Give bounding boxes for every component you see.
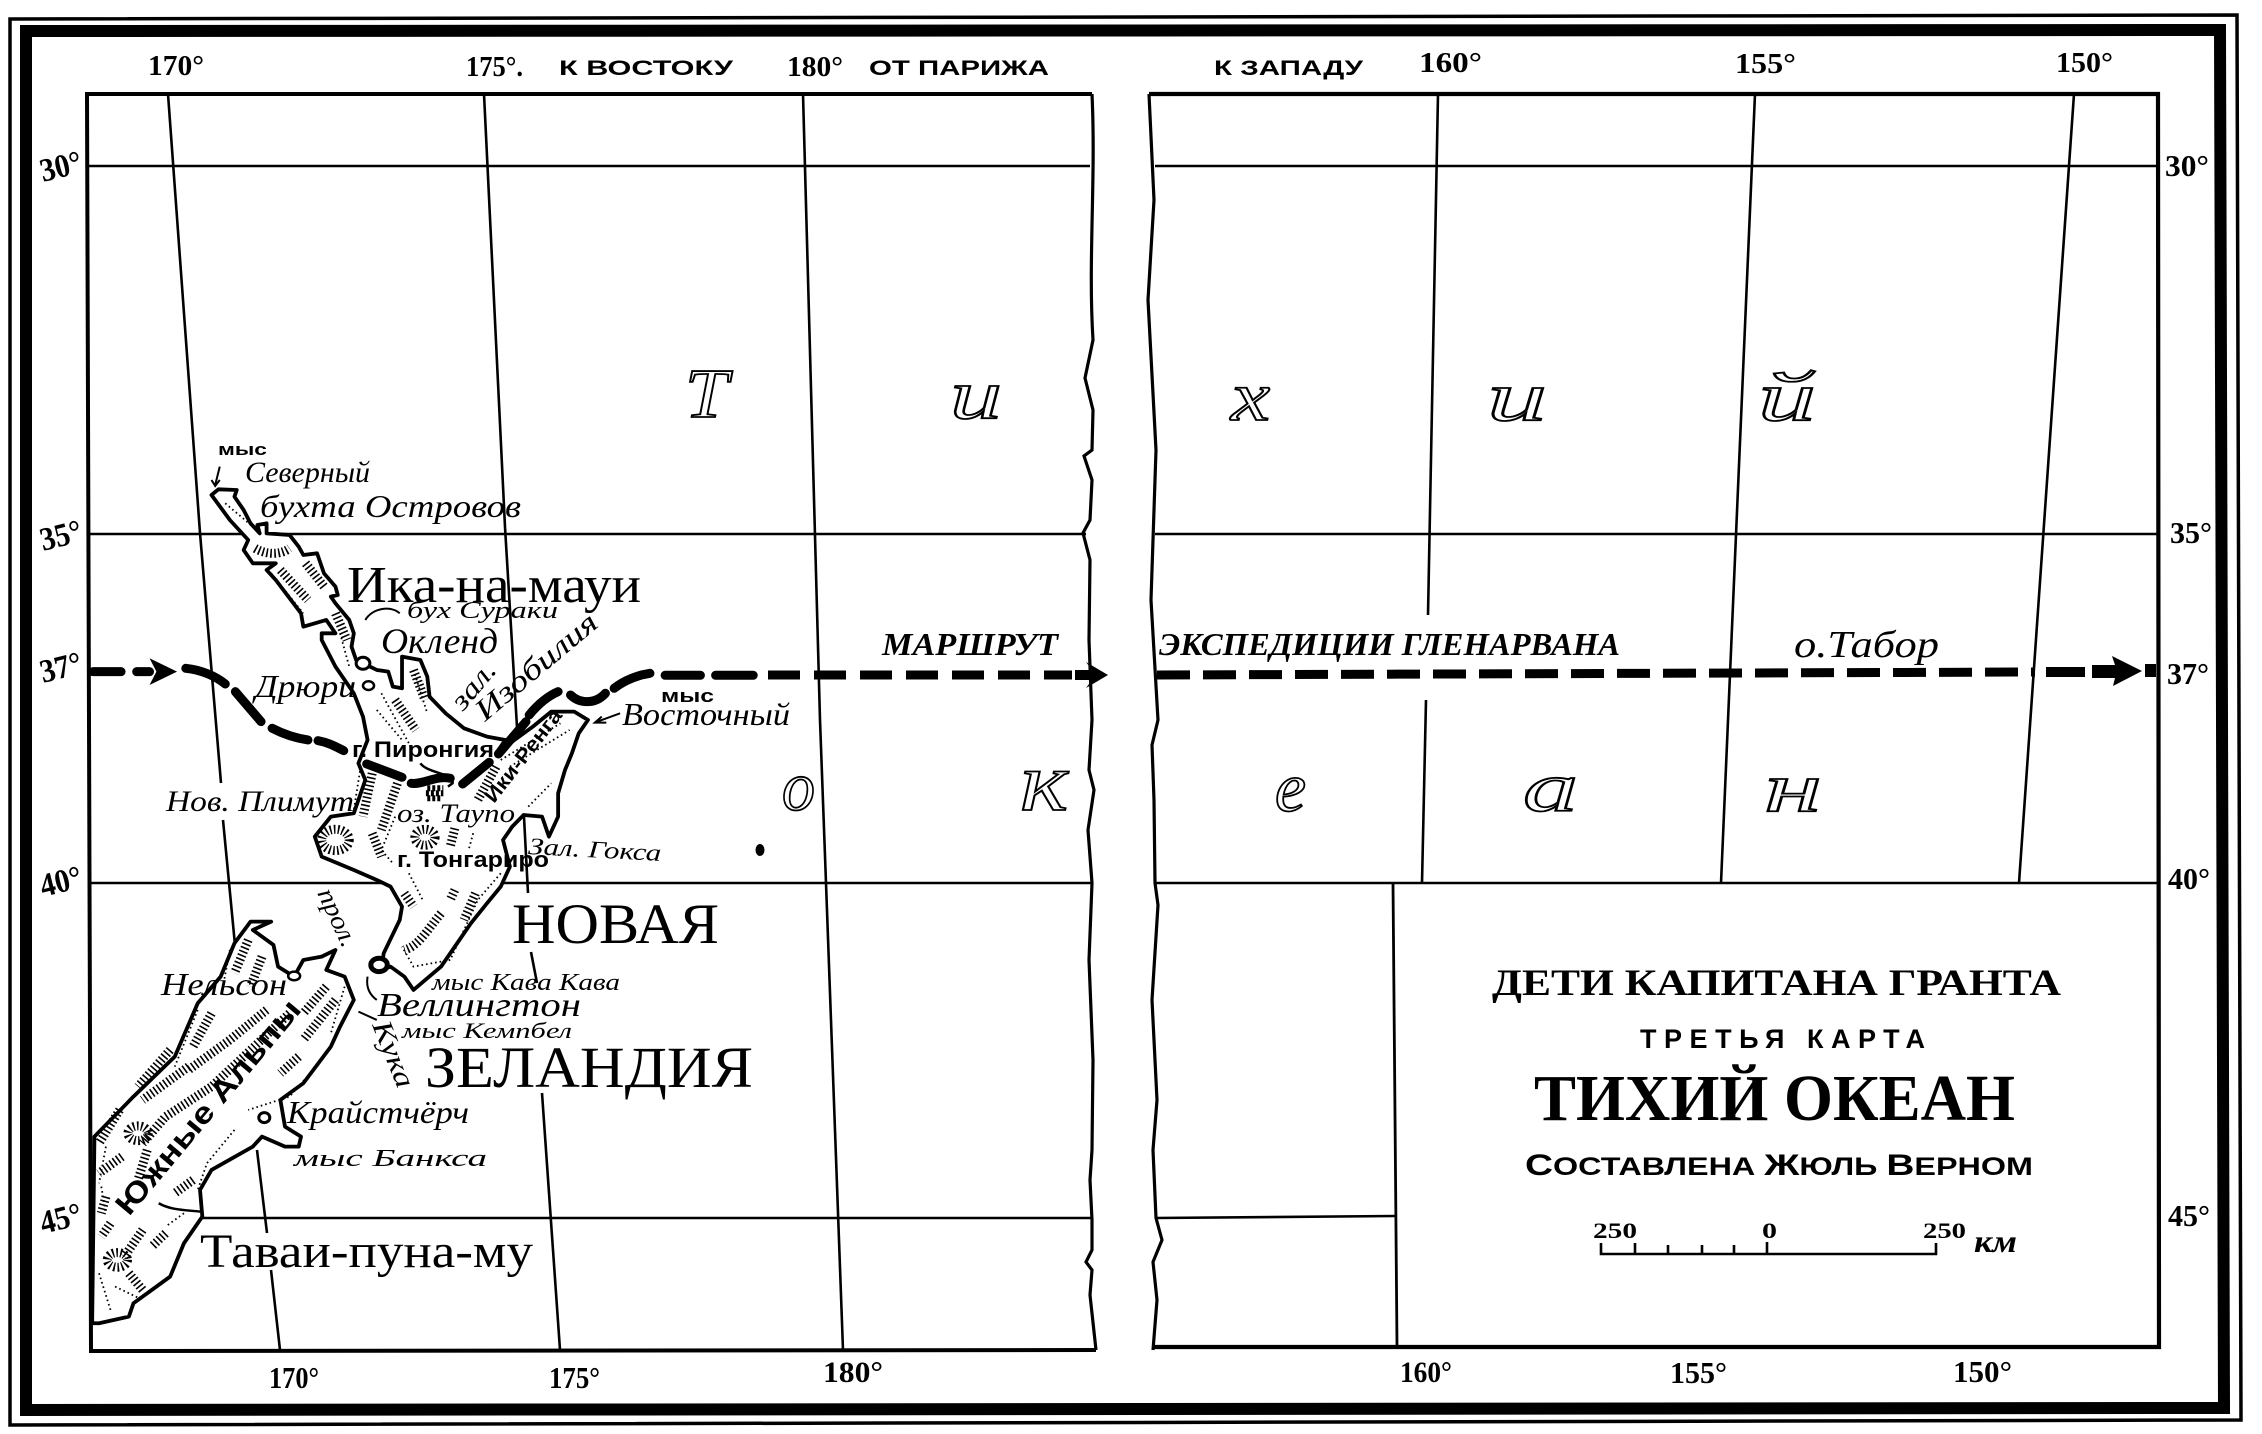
Веллингтон: Веллингтон [377,987,581,1024]
route arrow right panel [2092,656,2156,686]
letter х: х [1230,359,1270,436]
г. Тонгариро: г. Тонгариро [397,847,549,872]
title block [1492,963,2061,1182]
мыс north: мыс [218,440,267,459]
map number: ТРЕТЬЯ КАРТА [1640,1024,1925,1054]
small leader arrows [212,467,620,1020]
label 180: 180° [787,52,843,83]
lat 30: 30° [36,145,86,190]
Зал. Гокса: Зал. Гокса [528,834,662,867]
letter н: н [1764,750,1822,827]
label 150: 150° [2056,48,2113,79]
ЗЕЛАНДИЯ: ЗЕЛАНДИЯ [425,1035,753,1100]
bottom 170: 170° [269,1360,319,1395]
panel: left map grid [87,94,1096,1351]
label east: К ВОСТОКУ [559,57,734,80]
Крайстчёрч: Крайстчёрч [286,1094,469,1130]
label west: К ЗАПАДУ [1214,57,1364,80]
lat 35: 35° [36,514,86,559]
scale 0: 0 [1762,1218,1777,1243]
label 175: 175°. [466,52,523,83]
lat 37 right: 37° [2167,656,2209,691]
small island dot [756,844,764,856]
scale bar [1593,1218,2017,1259]
route across right panel [1157,656,2156,686]
bottom 160: 160° [1400,1356,1452,1389]
lat 45 right: 45° [2168,1198,2210,1233]
г. Пиронгия: г. Пиронгия [352,737,494,762]
бух Сураки: бух Сураки [407,598,558,624]
km unit: км [1974,1223,2017,1259]
Северный: Северный [245,456,370,489]
South island labels [109,883,753,1278]
Нельсон: Нельсон [160,966,287,1002]
panel: right map grid [1148,94,2159,1350]
экспедиции Гленарвана: ЭКСПЕДИЦИИ ГЛЕНАРВАНА [1159,626,1620,662]
letter и: и [950,357,1002,434]
letter й: й [1758,359,1816,436]
letter о: о [782,749,815,826]
right latitude labels [2165,148,2212,1233]
north island [212,489,588,990]
bottom longitude labels [269,1354,2012,1395]
зал.: зал. [444,655,503,717]
New Zealand islands [92,467,753,1323]
прол.: прол. [312,883,364,952]
lat 40: 40° [36,860,86,905]
Ики-Ренга: Ики-Ренга [481,704,568,807]
Таваи-пуна-му: Таваи-пуна-му [200,1225,533,1278]
label 170: 170° [148,51,204,82]
route labels [881,624,1939,666]
Окленд: Окленд [381,621,498,661]
North island labels [165,440,790,872]
lat 40 right: 40° [2168,861,2210,896]
letter е: е [1275,750,1306,827]
Ика-на-мауи: Ика-на-мауи [347,557,641,614]
оз. Таупо: оз. Таупо [397,799,515,828]
bottom 180: 180° [823,1356,883,1389]
letter Т: Т [685,356,734,433]
мыс Банкса: мыс Банкса [292,1146,487,1172]
lat 35 right: 35° [2170,515,2212,550]
Маршрут: МАРШРУТ [881,626,1060,662]
Нов. Плимут: Нов. Плимут [165,785,354,818]
о. Табор: о.Табор [1794,624,1939,666]
author line: С ОСТАВЛЕНА Ж ЮЛЬ В ЕРНОМ [1525,1149,2033,1182]
town markers [259,657,387,1123]
Дрюри: Дрюри [252,668,356,704]
ocean name letters: Тихий океан [685,356,1822,829]
label from Paris: ОТ ПАРИЖА [869,57,1049,80]
Изобилия: Изобилия [467,606,604,728]
left latitude labels [36,145,86,1242]
мыс Кемпбел: мыс Кемпбел [401,1018,572,1043]
бухта Островов: бухта Островов [260,488,521,524]
mountain hachures [99,503,570,1310]
Кука: Кука [365,1015,420,1093]
Восточный: Восточный [622,696,790,732]
expedition route across New Zealand [93,658,753,784]
letter а: а [1523,750,1578,827]
top longitude labels [148,48,2113,83]
label 160: 160° [1419,48,1482,79]
route east of New Zealand [768,662,1108,688]
bottom 155: 155° [1670,1355,1727,1390]
мыс east: мыс [661,686,714,706]
bottom 175: 175° [549,1360,600,1395]
letter к: к [1020,736,1069,829]
route arrow left panel [1075,662,1108,688]
map name: ТИХИЙ ОКЕАН [1534,1062,2015,1135]
scale 250 right: 250 [1923,1218,1966,1243]
lat 37: 37° [36,646,86,691]
мыс Кава Кава: мыс Кава Кава [431,970,620,996]
bottom 150: 150° [1953,1354,2012,1389]
scale 250 left: 250 [1593,1218,1637,1243]
lat 30 right: 30° [2165,148,2209,183]
НОВАЯ: НОВАЯ [512,893,719,956]
lat 45: 45° [36,1197,86,1242]
book title: ДЕТИ КАПИТАНА ГРАНТА [1492,963,2061,1004]
Южные Альпы: Южные Альпы [109,993,308,1221]
south island [92,922,354,1323]
label 155: 155° [1735,49,1796,80]
letter и 2: и [1487,359,1547,436]
